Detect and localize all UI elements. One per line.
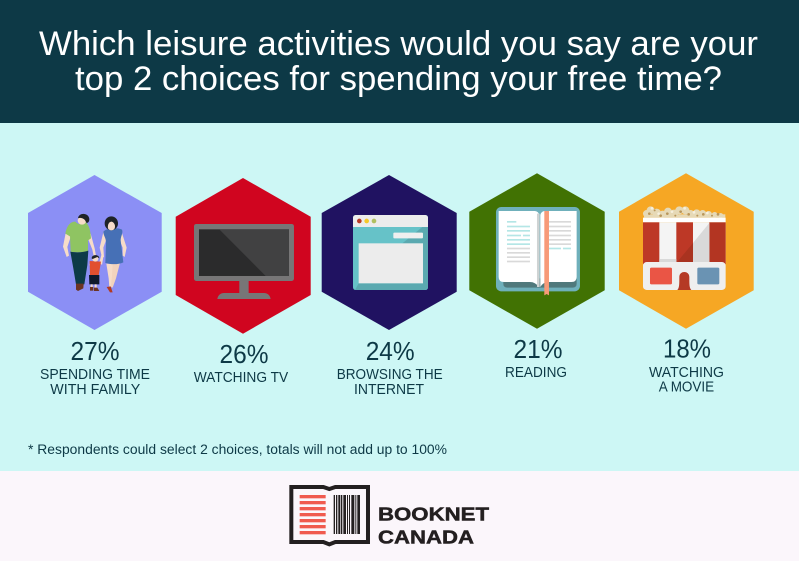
stat: 27%: 27% xyxy=(70,338,120,366)
stat: 18% xyxy=(649,336,724,396)
icon: open book xyxy=(496,207,580,295)
logo: Booknet Canada xyxy=(291,487,490,547)
title xyxy=(39,25,758,98)
label: browsing the internet: INTERNET xyxy=(354,381,424,398)
logo wordmark: BOOKNET xyxy=(378,504,490,525)
panel: watching a movie xyxy=(619,173,754,396)
title: top 2 choices for spending your free time? xyxy=(75,60,722,98)
label: browsing the internet xyxy=(337,366,443,398)
label: watching a movie xyxy=(649,364,724,396)
stat: 27% xyxy=(40,338,150,398)
title: Which leisure activities would you say are your xyxy=(39,25,758,63)
icon: family xyxy=(63,214,127,292)
footnote: * Respondents could select 2 choices, totals will not add up to 100% xyxy=(28,442,447,457)
icon: television xyxy=(194,224,294,299)
header band with title xyxy=(0,0,799,123)
stat: 21% xyxy=(505,336,567,381)
label: watching a movie: WATCHING xyxy=(649,364,724,381)
stat: 26% xyxy=(194,341,288,386)
stat: 26%: 26% xyxy=(220,341,268,369)
panel: browsing the internet xyxy=(322,175,457,398)
label: browsing the internet: BROWSING THE xyxy=(337,366,443,383)
icon: browser window xyxy=(353,215,428,290)
panel: watching TV xyxy=(176,178,311,386)
logo wordmark xyxy=(378,504,490,547)
label: watching a movie: A MOVIE xyxy=(659,379,714,396)
stat: 18%: 18% xyxy=(663,336,711,364)
stat: 24%: 24% xyxy=(366,338,415,366)
label: spending time with family: WITH FAMILY xyxy=(50,381,140,398)
stat: 21%: 21% xyxy=(514,336,562,364)
stat: 24% xyxy=(337,338,443,398)
label: reading: READING xyxy=(505,364,567,381)
footer band with logo xyxy=(0,471,799,561)
panel: reading xyxy=(469,173,605,381)
logo icon: book with barcode xyxy=(291,487,368,544)
label: spending time with family: SPENDING TIME xyxy=(40,366,150,383)
logo wordmark: CANADA xyxy=(378,526,474,547)
label: spending time with family xyxy=(40,366,150,398)
panel: spending time with family xyxy=(28,175,162,398)
label: watching TV: WATCHING TV xyxy=(194,369,288,386)
icon: popcorn and 3D glasses xyxy=(643,206,726,290)
